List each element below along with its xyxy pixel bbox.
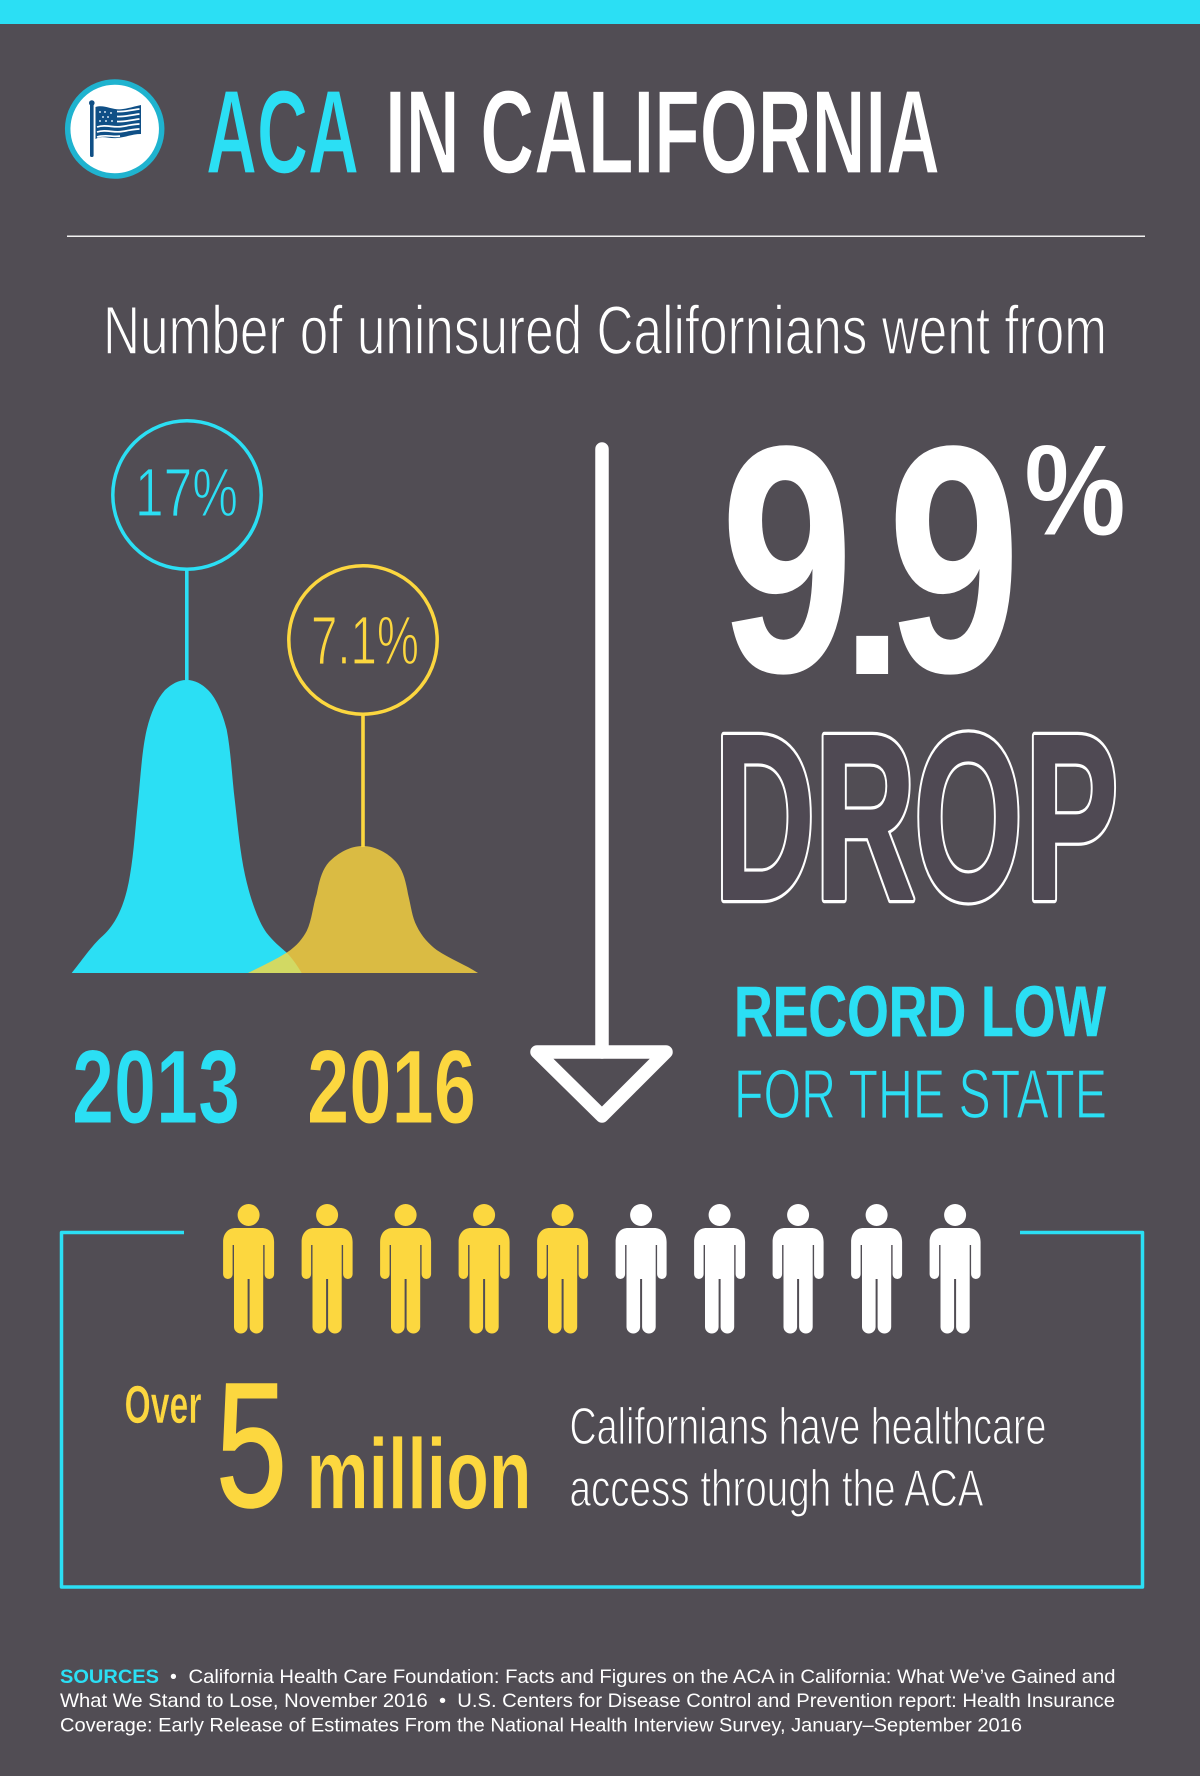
stat: over 5 million: million bbox=[306, 1418, 532, 1530]
stat: over 5 million: Over bbox=[124, 1375, 202, 1435]
outlined word: DROP: DROP bbox=[714, 686, 1118, 950]
callout: 17%: 17% bbox=[135, 454, 238, 531]
sources: What We Stand to Lose, November 2016 • U.S. Centers for Disease Control and Prevention report: Health Insurance bbox=[60, 1690, 1115, 1712]
callout: 17% bbox=[113, 421, 261, 681]
stat: 9.9%: 9 bbox=[720, 378, 854, 740]
sources: Coverage: Early Release of Estimates From the National Health Interview Survey, January–September 2016 bbox=[60, 1714, 1022, 1736]
bell: 2013 bbox=[72, 680, 302, 973]
stat: 9.9%: % bbox=[1024, 417, 1126, 563]
bell: 2016 bbox=[248, 846, 478, 973]
sources: California Health Care Foundation: Facts and Figures on the ACA in California: What We’ve Gained and bbox=[188, 1666, 1116, 1688]
description text bbox=[570, 1398, 1046, 1518]
top accent bar bbox=[0, 0, 1200, 24]
stat: 9.9%: 9 bbox=[887, 378, 1021, 740]
arrow: downward bbox=[537, 449, 666, 1116]
callout: 7.1%: 7.1% bbox=[311, 602, 419, 679]
sources bbox=[60, 1666, 1116, 1736]
title: ACA bbox=[206, 66, 359, 199]
sources: SOURCES bbox=[60, 1666, 159, 1688]
stat: 9.9% bbox=[720, 378, 1126, 740]
icon: flag badge bbox=[68, 82, 162, 176]
year label: 2013: 2013 bbox=[72, 1029, 240, 1146]
stat: 9.9%: . bbox=[841, 443, 904, 729]
stat: over 5 million bbox=[124, 1346, 532, 1544]
panel: healthcare access bbox=[62, 1204, 1142, 1587]
description text: access through the ACA bbox=[570, 1460, 984, 1518]
record low callout bbox=[734, 973, 1107, 1133]
stat: over 5 million: 5 bbox=[216, 1346, 287, 1544]
callout: 7.1% bbox=[289, 566, 437, 847]
year label: 2016: 2016 bbox=[307, 1029, 476, 1146]
people row bbox=[223, 1204, 981, 1334]
chart: uninsured rate bells bbox=[72, 421, 478, 1146]
outlined word: DROP: DROP bbox=[714, 686, 1118, 950]
title bbox=[206, 66, 940, 199]
sources: • bbox=[170, 1666, 177, 1688]
